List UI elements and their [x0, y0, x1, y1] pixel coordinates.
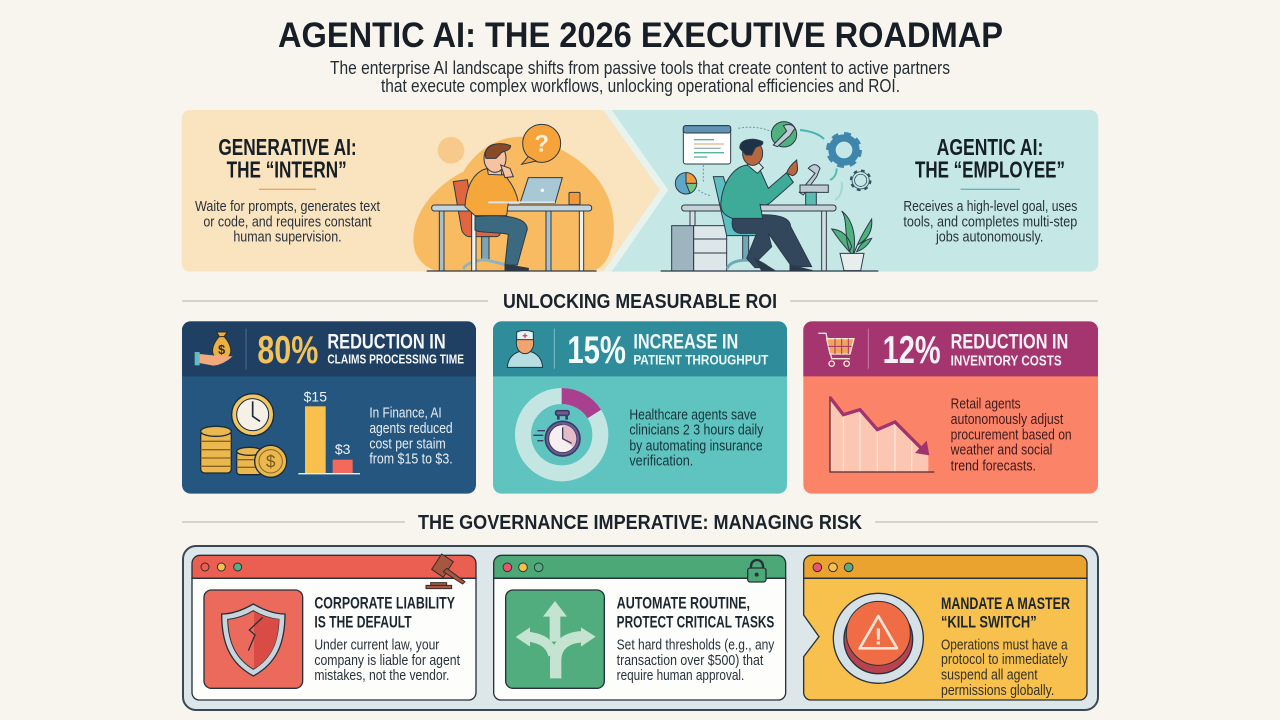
- subtitle: that execute complex workflows, unlocking operational efficiencies and ROI.: [381, 76, 900, 96]
- panel: agentic AI banner: [610, 110, 1098, 272]
- subtitle: [330, 58, 950, 96]
- stat label: REDUCTION IN: [951, 330, 1068, 354]
- kill switch text: permissions globally.: [941, 683, 1054, 699]
- automate text: Set hard thresholds (e.g., any: [617, 637, 775, 653]
- panel: governance container: [183, 546, 1098, 710]
- bar chart: cost per claim: $15: [304, 388, 327, 404]
- icon: shopping cart: [818, 333, 854, 366]
- card: corporate liability: [192, 554, 476, 700]
- generative description: [195, 199, 380, 246]
- liability text: mistakes, not the vendor.: [314, 668, 449, 684]
- retail description: weather and social: [950, 443, 1052, 459]
- icon: stopwatch: [533, 411, 580, 456]
- stat: 80%: 80%: [257, 329, 318, 372]
- liability text: company is liable for agent: [314, 653, 460, 669]
- agentic heading: [915, 134, 1065, 183]
- panel: healthcare card: [493, 321, 787, 494]
- healthcare description: clinicians 2 3 hours daily: [629, 423, 764, 439]
- kill switch heading: MANDATE A MASTER: [941, 594, 1070, 613]
- finance description: [369, 405, 453, 468]
- stat label: INCREASE IN: [633, 330, 738, 354]
- stat: 12%: 12%: [883, 329, 941, 372]
- healthcare description: by automating insurance: [629, 438, 763, 454]
- liability text: Under current law, your: [314, 637, 440, 653]
- heading: unlocking measurable ROI: UNLOCKING MEASURABLE ROI: [503, 291, 777, 313]
- kill switch heading: [941, 594, 1070, 631]
- kill switch text: Operations must have a: [941, 637, 1068, 653]
- kill switch text: protocol to immediately: [941, 652, 1068, 668]
- stat label: INVENTORY COSTS: [951, 353, 1062, 369]
- generative heading: THE “INTERN”: [227, 157, 347, 183]
- liability heading: CORPORATE LIABILITY: [314, 593, 455, 612]
- automate heading: AUTOMATE ROUTINE,: [617, 593, 750, 612]
- automate text: require human approval.: [617, 668, 744, 684]
- icon: emergency stop button: [833, 593, 923, 683]
- stat label: REDUCTION IN: [327, 330, 446, 354]
- generative description: or code, and requires constant: [203, 215, 372, 231]
- generative description: Waite for prompts, generates text: [195, 199, 380, 215]
- agentic heading: THE “EMPLOYEE”: [915, 157, 1065, 183]
- stat label: [327, 330, 464, 367]
- agentic description: tools, and completes multi-step: [903, 215, 1077, 231]
- automate text: transaction over $500) that: [617, 653, 763, 669]
- heading: governance imperative: THE GOVERNANCE IMPERATIVE: MANAGING RISK: [418, 512, 863, 534]
- generative heading: GENERATIVE AI:: [218, 134, 357, 160]
- stat label: PATIENT THROUGHPUT: [633, 352, 769, 368]
- icon: padlock: [748, 560, 766, 582]
- panel: generative AI banner: ?: [534, 131, 549, 158]
- icon: gavel: [426, 554, 465, 589]
- stat: 15%: 15%: [567, 329, 626, 372]
- liability heading: [314, 593, 455, 631]
- icon: cracked shield: [204, 590, 303, 688]
- agentic description: jobs autonomously.: [935, 230, 1043, 246]
- agentic heading: AGENTIC AI:: [937, 134, 1043, 160]
- healthcare description: Healthcare agents save: [629, 408, 757, 424]
- panel: finance card: $: [266, 451, 276, 471]
- bar chart: cost per claim: $3: [335, 441, 351, 457]
- subtitle: The enterprise AI landscape shifts from passive tools that create content to active partners: [330, 58, 950, 78]
- panel: retail card: [803, 321, 1098, 494]
- healthcare description: verification.: [629, 454, 693, 470]
- retail description: Retail agents: [951, 397, 1021, 413]
- icon: emergency stop button: !: [874, 624, 882, 650]
- generative description: human supervision.: [233, 230, 342, 246]
- stat label: [633, 330, 769, 368]
- illustration: employee at desk with tools: [672, 122, 872, 271]
- finance description: In Finance, AI: [369, 405, 442, 421]
- automate heading: [617, 593, 774, 631]
- donut chart: 15% of time: [523, 396, 600, 473]
- retail description: autonomously adjust: [951, 412, 1063, 428]
- liability heading: IS THE DEFAULT: [314, 612, 412, 631]
- icon: hand holding money bag: [195, 332, 233, 366]
- liability text: [314, 637, 460, 684]
- illustration: intern at desk with laptop: [413, 124, 614, 271]
- agentic description: Receives a high-level goal, uses: [903, 199, 1077, 215]
- stat label: CLAIMS PROCESSING TIME: [327, 352, 464, 367]
- title: AGENTIC AI: THE 2026 EXECUTIVE ROADMAP: [278, 16, 1003, 55]
- generative heading: [218, 134, 357, 183]
- automate text: [617, 637, 775, 684]
- healthcare description: [629, 408, 764, 470]
- card: kill switch: [804, 555, 1087, 700]
- bar chart: cost per claim: [298, 388, 360, 474]
- icon: branching arrows: [506, 590, 604, 688]
- automate heading: PROTECT CRITICAL TASKS: [617, 612, 774, 631]
- panel: finance card: [182, 321, 476, 494]
- card: automate routine: [494, 555, 786, 700]
- finance description: from $15 to $3.: [369, 452, 453, 468]
- panel: generative AI banner: [182, 110, 668, 272]
- icon: hand holding money bag: $: [218, 343, 225, 357]
- finance description: cost per staim: [369, 437, 446, 453]
- stat label: [951, 330, 1068, 369]
- kill switch heading: “KILL SWITCH”: [941, 612, 1037, 631]
- icon: clinician: [507, 330, 543, 367]
- retail description: [950, 397, 1072, 474]
- retail description: trend forecasts.: [951, 458, 1036, 474]
- kill switch text: [941, 637, 1068, 699]
- finance description: agents reduced: [369, 421, 453, 437]
- icon: clock and coins: [201, 394, 287, 477]
- kill switch text: suspend all agent: [941, 667, 1038, 683]
- retail description: procurement based on: [951, 428, 1072, 444]
- line chart: falling inventory costs: [830, 396, 934, 472]
- agentic description: [903, 199, 1077, 246]
